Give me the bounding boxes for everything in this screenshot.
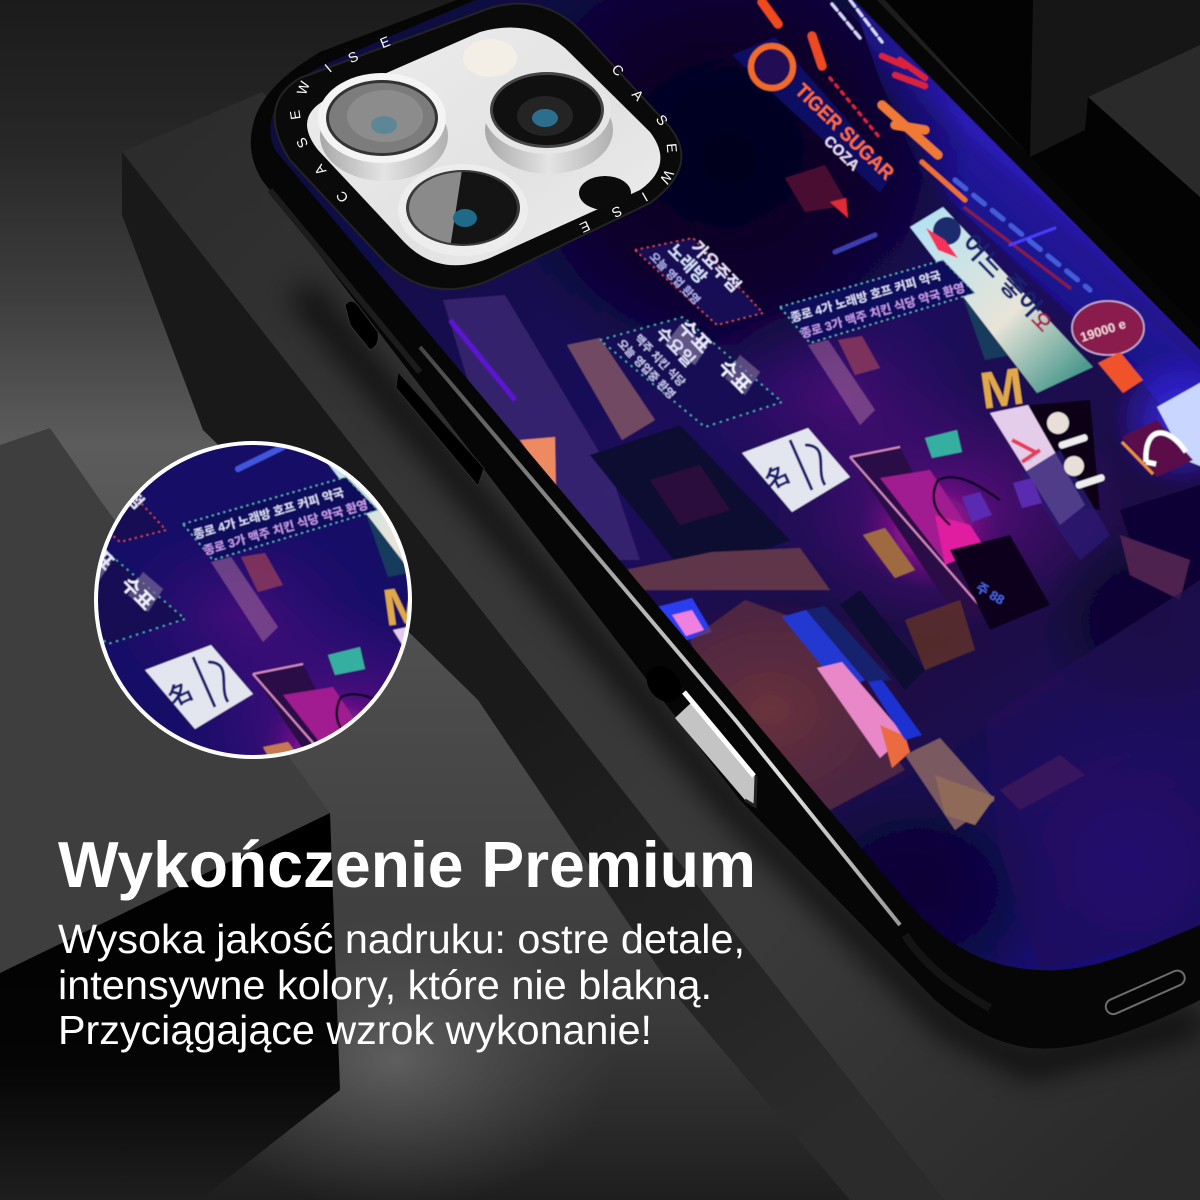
sign: Korean panel lower: 수요일 (652, 324, 698, 371)
neon red strokes (762, 0, 1090, 290)
body text: Przyciągające wzrok wykonanie! (58, 1007, 652, 1053)
orange sign (863, 528, 915, 578)
brand ring text: A (310, 161, 329, 178)
sign: McDonald's arches: M (977, 357, 1028, 421)
circle: Korean strip: 종로 3가 맥주 치킨 식당 약국 환영 (202, 497, 369, 558)
awning (625, 548, 830, 590)
circle: teal sign (328, 647, 365, 675)
sign: Korean long strip (780, 260, 975, 343)
sign: Korean panel lower: 수표 (713, 355, 756, 398)
circle: white calligraphy sign: 名 (164, 678, 197, 712)
circle: Korean strip (183, 477, 378, 560)
left building (443, 295, 640, 560)
circle: white sign corner (326, 464, 406, 578)
sign: bright blue panel (1157, 380, 1200, 468)
charging slot (1103, 968, 1187, 1016)
circle: Korean panels (98, 494, 186, 645)
artwork base and light pools (250, 0, 1200, 1050)
sign: Korean long white: 오 (1026, 308, 1055, 337)
glossy edge highlight (420, 347, 900, 925)
neon blue pink sign (658, 597, 712, 641)
teal sign (925, 430, 962, 458)
brand ring text: E (664, 143, 680, 153)
magnified detail circle (94, 441, 412, 759)
sign: Korean panel lower (600, 315, 782, 427)
camera bezel (275, 4, 681, 289)
lens: upper left (318, 73, 448, 181)
street storefront strip (690, 590, 995, 830)
brand ring text (286, 33, 680, 236)
sign: Korean panel upper: 가요주점 (687, 238, 744, 296)
hanging signs (808, 336, 880, 425)
street surface (985, 570, 1200, 970)
lens: upper right (483, 66, 613, 174)
sign: round price tag: 19000 e (1078, 316, 1128, 345)
sign: neon arch (1122, 420, 1193, 477)
brand ring text: S (653, 112, 671, 128)
printed neon city artwork (250, 0, 1200, 1050)
circle: McDonald's arches: M (380, 574, 431, 638)
camera plate (307, 28, 660, 265)
brand ring text: E (577, 218, 593, 236)
heading: Wykończenie Premium (58, 828, 756, 901)
sign: Korean panel upper: 노래방 (664, 241, 711, 288)
body text: intensywne kolory, które nie blakną. (58, 962, 712, 1008)
sign stack right (990, 400, 1110, 560)
magenta shopfront (850, 447, 1000, 615)
brand ring text: C (609, 61, 627, 79)
brand ring text: I (321, 61, 335, 75)
sign: red small (1098, 352, 1143, 393)
sign: round price tag (1072, 301, 1144, 355)
sign: Korean panel lower: 맥주 치킨 식당 (632, 332, 688, 389)
sign: Korean long strip: 종로 3가 맥주 치킨 식당 약국 환영 (799, 280, 966, 341)
circle: hanging signs (211, 553, 283, 642)
flash (463, 39, 517, 77)
circle: Korean panels: 가요주점 (90, 455, 147, 513)
circle: orange tile (263, 742, 303, 769)
building right and corner tiles (1120, 480, 1200, 600)
phone shadow (300, 290, 1200, 1065)
brand ring text: S (345, 48, 361, 66)
brand ring text: W (656, 167, 677, 187)
side button: upper (345, 301, 378, 350)
brand ring text: C (333, 188, 351, 206)
body text: Wysoka jakość nadruku: ostre detale, (58, 916, 745, 962)
sign: Korean long strip: 종로 4가 노래방 호프 커피 약국 (789, 268, 943, 325)
brand ring text: E (286, 109, 304, 121)
sign: Korean panel lower: 오늘 영업중 환영 (615, 336, 678, 401)
orange pillar (520, 437, 556, 492)
black sign with blue text (950, 535, 1050, 630)
camera island (275, 4, 681, 289)
body text (58, 916, 745, 1053)
dark hoarding (590, 424, 790, 560)
sign: white lit calligraphy: 名 (761, 461, 794, 495)
hole by silver button (640, 659, 688, 709)
sign: Korean long white: 어느 좋아 (956, 228, 1049, 323)
mic hole (579, 176, 631, 210)
purple squares (962, 478, 1042, 522)
sign: Korean panel lower: 수표 (673, 315, 716, 358)
brand ring text: E (378, 33, 392, 51)
brand ring text: A (629, 86, 648, 104)
maroon panel (785, 165, 848, 218)
sign: Tiger Sugar: TIGER SUGAR (791, 80, 898, 185)
circle: magenta shopfront (253, 664, 403, 832)
sign: Korean long white (910, 207, 1093, 393)
sign: Tiger Sugar: COZA (820, 133, 863, 175)
circle: Korean strip: 종로 4가 노래방 호프 커피 약국 (192, 485, 346, 542)
circle: white stack (393, 622, 488, 742)
brand ring text: S (609, 203, 625, 221)
sign: Tiger Sugar (732, 37, 898, 193)
sign: white lit calligraphy (742, 428, 850, 512)
circle: white calligraphy sign (145, 645, 253, 729)
brand ring text: W (293, 78, 313, 97)
circle: neon dash (238, 447, 283, 469)
sign: Korean panel upper (635, 238, 763, 325)
side button: volume (396, 372, 484, 486)
brand ring text: I (639, 189, 651, 205)
sign: Korean panel upper: 오늘 영업 환영 (647, 249, 703, 307)
black sign with blue text: 주 88 (974, 580, 1007, 608)
lens: bottom (395, 160, 528, 256)
circle: Korean panels: 수표 (116, 572, 159, 615)
phone case body (251, 0, 1200, 1049)
silver side button (675, 692, 756, 806)
circle: Korean panels: 수표 (76, 532, 119, 575)
brand ring text: S (293, 135, 311, 151)
